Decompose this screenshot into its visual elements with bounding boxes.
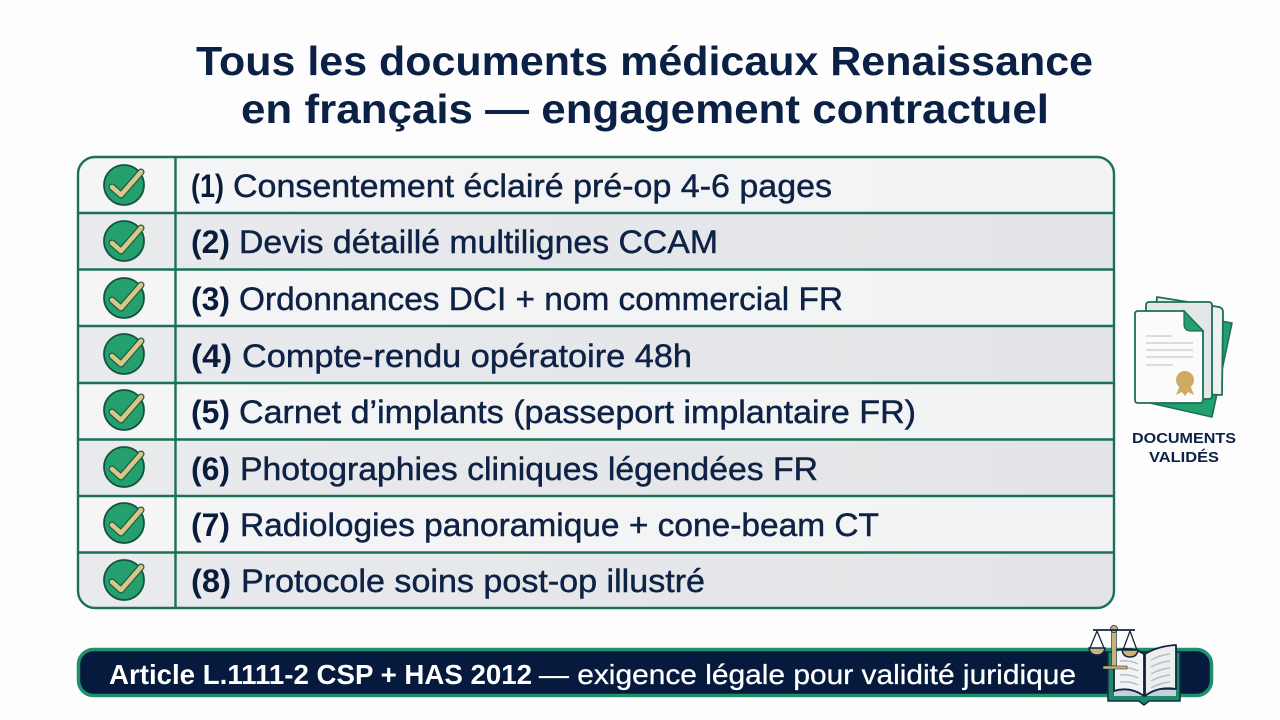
row 2: (2) [191, 224, 230, 260]
row 6: (6) [191, 451, 230, 487]
row 1 [104, 165, 832, 205]
label: documents validés [1132, 431, 1236, 466]
row 8: Protocole soins post-op illustré [241, 563, 705, 599]
callout: legal banner: — exigence légale pour validité juridique [539, 659, 1076, 690]
row 7: (7) [191, 507, 230, 543]
row 6 [104, 447, 818, 487]
title: en français — engagement contractuel [241, 86, 1049, 132]
row 3: Ordonnances DCI + nom commercial FR [239, 281, 843, 317]
row 2 [104, 221, 718, 261]
row 1: Consentement éclairé pré-op 4-6 pages [233, 168, 832, 204]
callout: legal banner [78, 650, 1212, 696]
icon: open book [1108, 645, 1180, 705]
row 6: Photographies cliniques légendées FR [240, 451, 818, 487]
row 8 [104, 560, 705, 600]
row 1: (1) [191, 168, 224, 204]
row 4: (4) [191, 338, 232, 374]
row 3: (3) [191, 281, 230, 317]
icon: scales of justice [1089, 626, 1138, 669]
row 5: Carnet d’implants (passeport implantaire FR) [239, 394, 916, 430]
icon: validated documents [1135, 297, 1232, 417]
row 5: (5) [191, 394, 230, 430]
label: documents validés: VALIDÉS [1149, 449, 1219, 466]
panel: checklist table [78, 157, 1114, 608]
row 4: Compte-rendu opératoire 48h [242, 338, 692, 374]
row 4 [104, 334, 692, 374]
title [196, 38, 1093, 132]
callout: legal banner: Article L.1111-2 CSP + HAS 2012 [109, 659, 532, 690]
label: documents validés: DOCUMENTS [1132, 431, 1236, 447]
title: Tous les documents médicaux Renaissance [196, 38, 1093, 84]
row 7: Radiologies panoramique + cone-beam CT [240, 507, 879, 543]
row 2: Devis détaillé multilignes CCAM [239, 224, 718, 260]
row 8: (8) [191, 563, 231, 599]
